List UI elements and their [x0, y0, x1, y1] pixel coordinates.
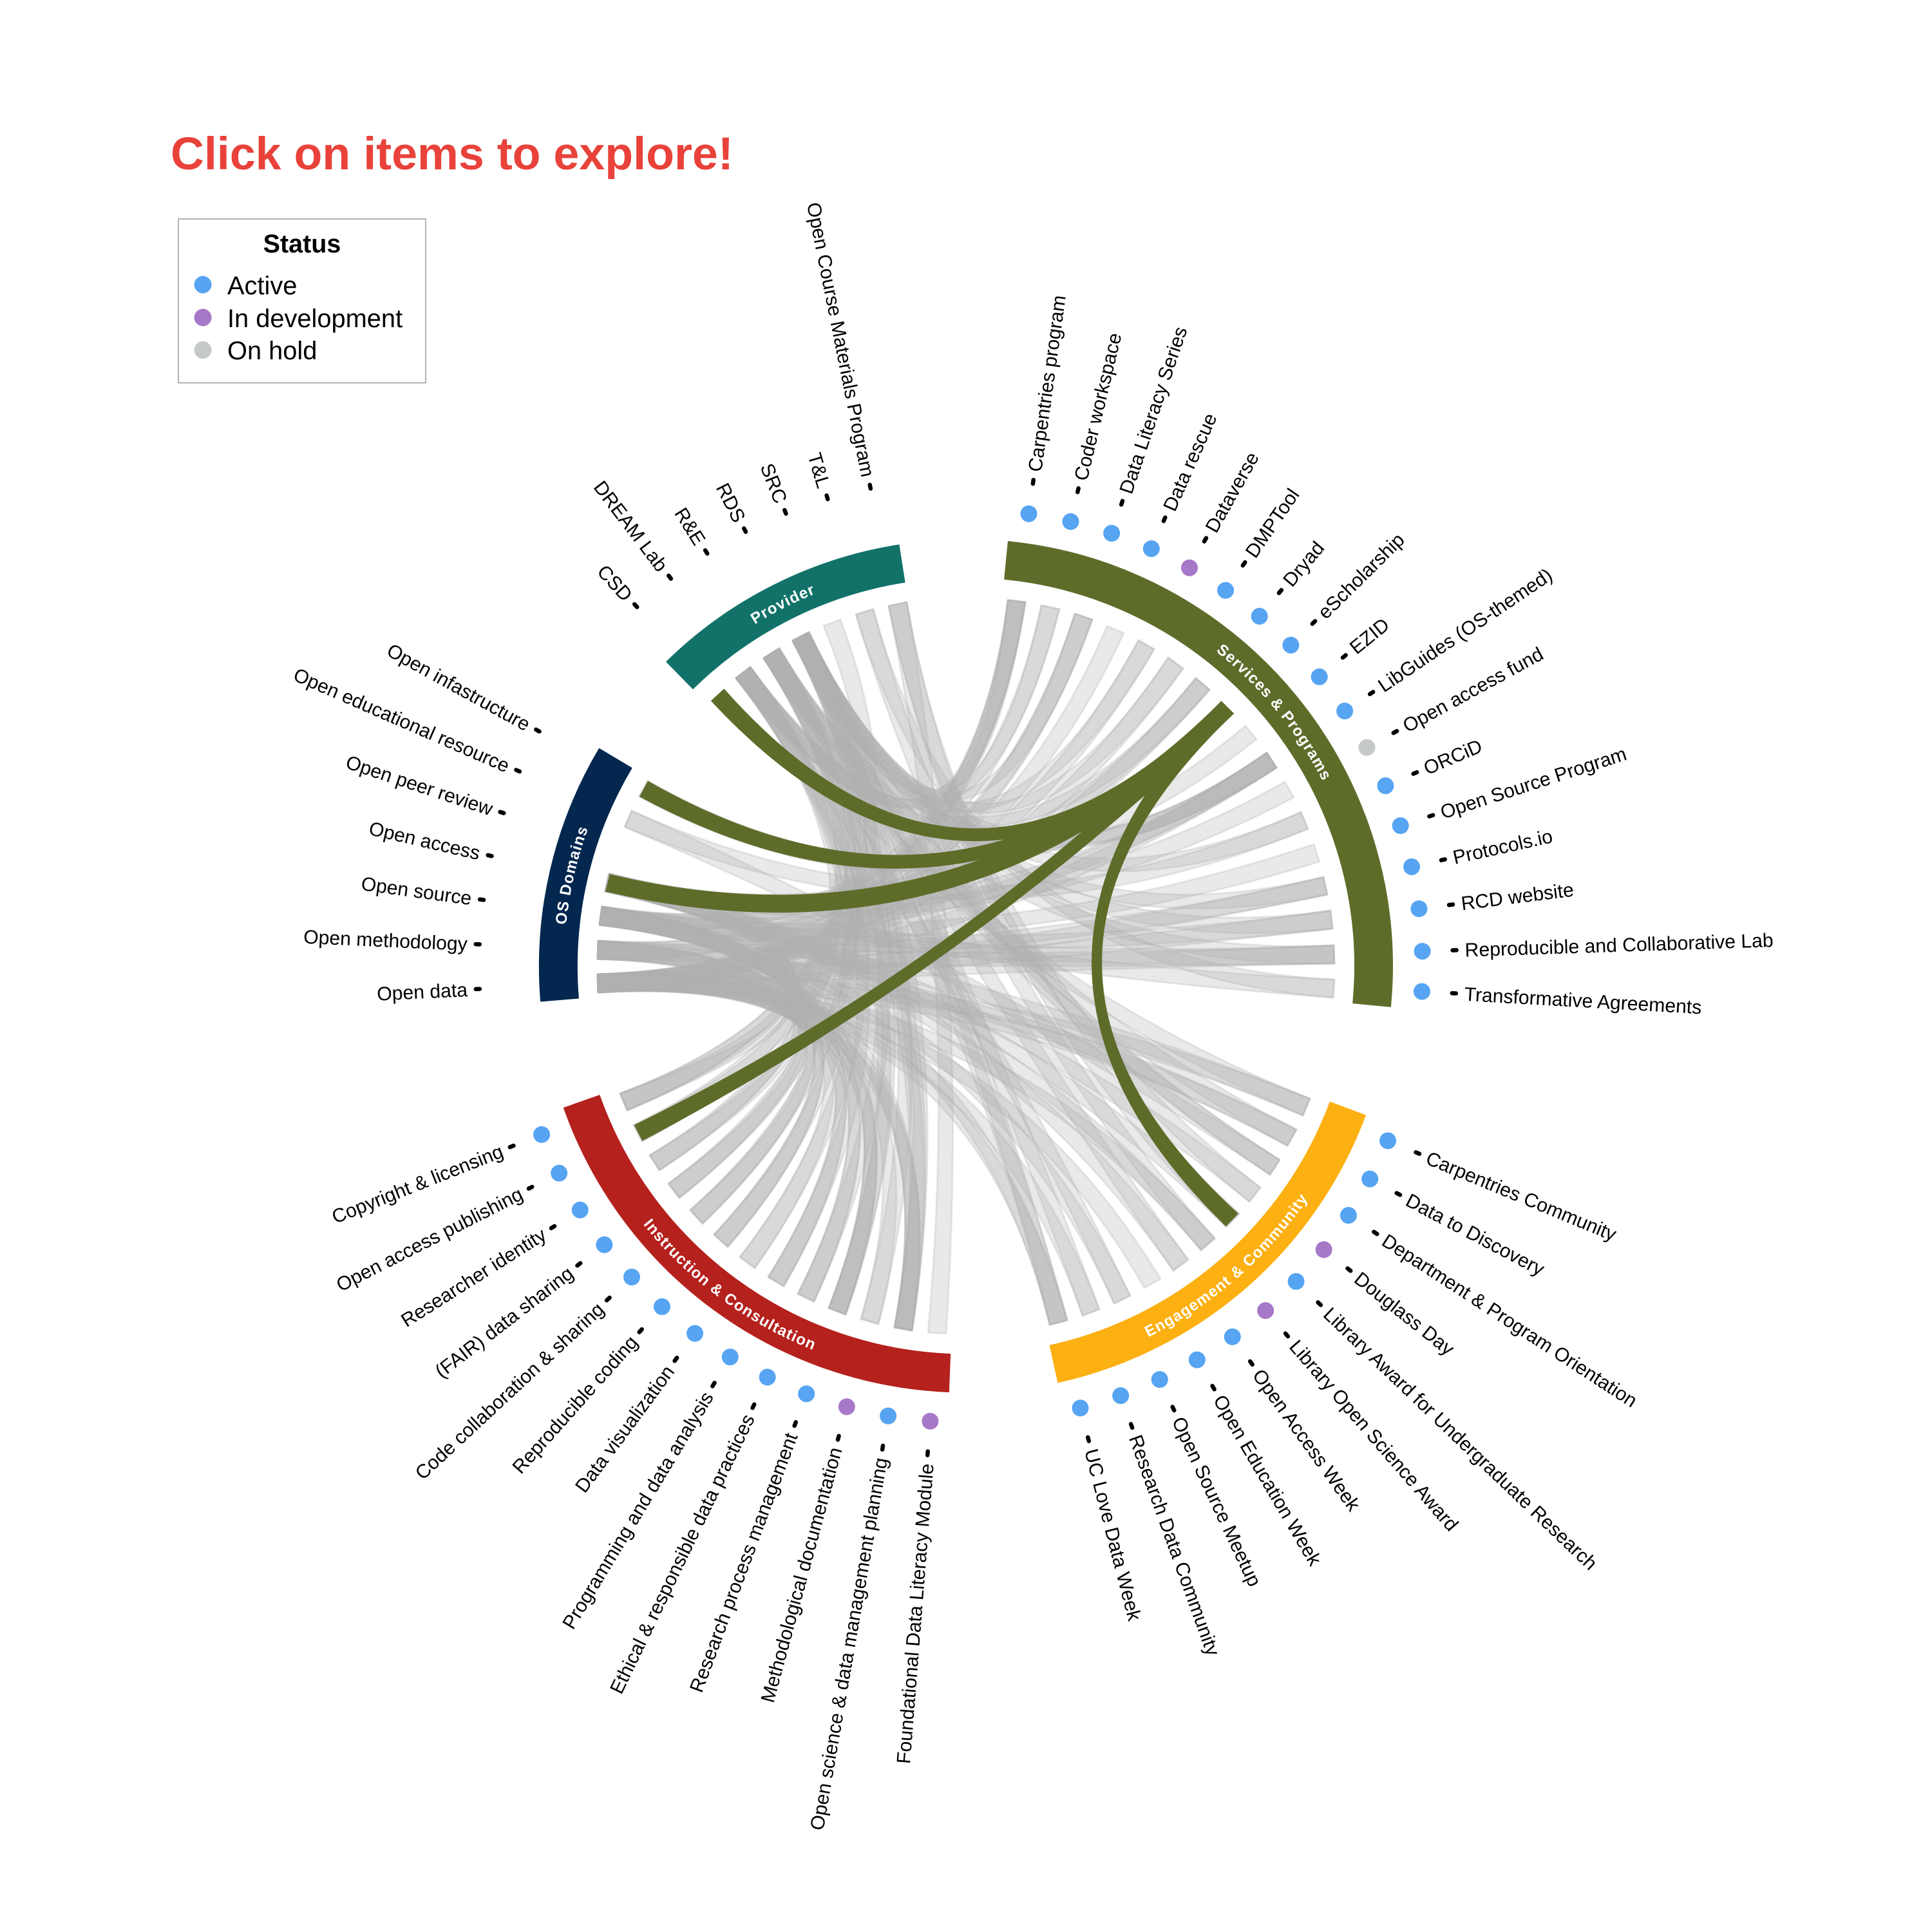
item: Methodological documentation: Methodological documentation: [757, 1445, 847, 1705]
item: Open methodology: Open methodology: [303, 927, 468, 955]
item: RCD website: [1410, 879, 1575, 921]
title: Click on items to explore!: [171, 128, 734, 180]
group arc: Instruction & Consultation: [563, 1095, 951, 1392]
legend: status: Status: [263, 230, 341, 258]
item: Coder workspace: Coder workspace: [1071, 331, 1126, 483]
item: Code collaboration & sharing: Code collaboration & sharing: [412, 1299, 609, 1484]
items: Instruction & Consultation: [329, 1122, 942, 1832]
group arc: Services & Programs: Services & Programs: [1217, 645, 1329, 780]
item: R&E: [670, 504, 715, 560]
legend: status: Active: [227, 272, 297, 300]
item: Transformative Agreements: Transformative Agreements: [1464, 984, 1702, 1018]
item: Data Literacy Series: [1099, 324, 1191, 545]
item: EZID: [1307, 614, 1394, 691]
item: LibGuides (OS-themed): [1332, 565, 1557, 725]
group arc: OS Domains: OS Domains: [556, 827, 587, 923]
item: EZID: EZID: [1346, 614, 1394, 659]
item: Programming and data analysis: Programming and data analysis: [559, 1388, 718, 1633]
item: RDS: RDS: [712, 480, 749, 526]
item: Open access publishing: Open access publishing: [333, 1184, 526, 1296]
item: Open peer review: Open peer review: [343, 752, 495, 820]
item: CSD: CSD: [592, 561, 636, 605]
item: Carpentries program: [1018, 294, 1070, 524]
item: Open Education Week: Open Education Week: [1209, 1392, 1325, 1570]
item: Library Open Science Award: Library Open Science Award: [1285, 1336, 1462, 1535]
items: Engagement & Community: [1067, 1128, 1641, 1659]
item: Copyright & licensing: Copyright & licensing: [329, 1141, 506, 1228]
item: Open Access Week: [1218, 1324, 1364, 1516]
item: Douglass Day: Douglass Day: [1350, 1268, 1459, 1360]
items: Services & Programs: [1018, 294, 1774, 1018]
group arc: Engagement & Community: Engagement & Community: [1144, 1194, 1307, 1337]
item: Data to Discovery: [1357, 1166, 1548, 1280]
item: Research Data Community: Research Data Community: [1124, 1432, 1224, 1659]
legend: status: On hold: [227, 337, 317, 365]
item: Carpentries Community: [1376, 1128, 1620, 1245]
group arc: Engagement & Community: [1050, 1101, 1367, 1383]
highlighted chords: eScholarship: [609, 693, 1234, 1222]
item: Coder workspace: [1059, 331, 1126, 533]
group arc: OS Domains: [538, 748, 632, 1002]
item: UC Love Data Week: UC Love Data Week: [1080, 1446, 1145, 1624]
item: Data visualization: [571, 1321, 709, 1497]
items: OS Domains: [290, 640, 544, 1005]
item: T&L: [803, 451, 837, 502]
item: Dataverse: Dataverse: [1202, 449, 1264, 536]
item: Library Award for Undergraduate Research: Library Award for Undergraduate Research: [1319, 1303, 1601, 1575]
item: RCD website: RCD website: [1460, 879, 1575, 914]
item: Research process management: Research process management: [686, 1430, 802, 1696]
item: Open access: Open access: [367, 818, 482, 864]
legend: status: [178, 219, 426, 383]
item: ORCiD: ORCiD: [1421, 735, 1486, 779]
item: Open Source Program: Open Source Program: [1438, 743, 1629, 824]
item: Data rescue: Data rescue: [1159, 410, 1222, 515]
item: DMPTool: [1213, 485, 1304, 603]
item: eScholarship: [1278, 529, 1409, 659]
item: Open Course Materials Program: Open Course Materials Program: [802, 201, 878, 478]
item: eScholarship: eScholarship: [1314, 529, 1409, 623]
item: Data rescue: [1139, 410, 1222, 561]
item: Researcher identity: Researcher identity: [397, 1224, 551, 1332]
item: Open science & data management planning: Open science & data management planning: [807, 1456, 892, 1832]
gray chords: [598, 600, 1334, 1334]
group arc: Services & Programs: [1004, 541, 1393, 1007]
item: LibGuides (OS-themed): LibGuides (OS-themed): [1374, 565, 1557, 697]
item: CSD: [592, 561, 645, 614]
chord diagram: [290, 201, 1774, 1832]
item: (FAIR) data sharing: [431, 1232, 618, 1383]
item: Open Source Meetup: Open Source Meetup: [1168, 1414, 1265, 1590]
item: Open data: Open data: [377, 980, 468, 1005]
item: Data Literacy Series: Data Literacy Series: [1116, 324, 1191, 497]
items: Provider: [589, 201, 880, 614]
item: Foundational Data Literacy Module: Foundational Data Literacy Module: [893, 1463, 938, 1765]
item: DREAM Lab: DREAM Lab: [589, 477, 672, 576]
group arc: Provider: Provider: [750, 586, 813, 624]
item: Reproducible coding: Reproducible coding: [509, 1332, 642, 1478]
item: Open infastructure: Open infastructure: [383, 640, 533, 735]
item: ORCiD: [1374, 735, 1486, 799]
item: Open Source Program: [1390, 743, 1629, 839]
item: T&L: T&L: [803, 451, 834, 491]
item: Reproducible and Collaborative Lab: Reproducible and Collaborative Lab: [1464, 930, 1774, 961]
item: Department & Program Orientation: Department & Program Orientation: [1378, 1230, 1641, 1412]
item: Open Education Week: [1183, 1347, 1325, 1570]
item: Open access fund: [1355, 643, 1547, 761]
group arc: Instruction & Consultation: Instruction & Consultation: [644, 1218, 814, 1350]
group arc: Provider: [666, 544, 905, 689]
item: (FAIR) data sharing: (FAIR) data sharing: [431, 1263, 578, 1383]
item: Open access fund: Open access fund: [1399, 643, 1547, 737]
item: Dryad: [1247, 538, 1329, 630]
item: Open educational resource: Open educational resource: [290, 665, 513, 777]
item: Copyright & licensing: [329, 1122, 554, 1228]
item: UC Love Data Week: [1067, 1397, 1145, 1624]
item: Douglass Day: [1311, 1236, 1459, 1360]
item: Open Access Week: Open Access Week: [1248, 1365, 1364, 1516]
item: Protocols.io: [1401, 826, 1555, 880]
legend: status: In development: [227, 305, 402, 333]
item: Open source: Open source: [360, 873, 473, 909]
item: Reproducible coding: [509, 1294, 676, 1478]
item: DMPTool: DMPTool: [1242, 485, 1304, 562]
item: Data visualization: Data visualization: [571, 1361, 679, 1497]
item: SRC: SRC: [756, 460, 791, 506]
item: Carpentries Community: Carpentries Community: [1423, 1148, 1620, 1245]
item: R&E: R&E: [670, 504, 709, 549]
item: Ethical & responsible data practices: Ethical & responsible data practices: [606, 1411, 759, 1697]
item: Dryad: Dryad: [1279, 538, 1329, 591]
item: Open access publishing: [333, 1160, 572, 1296]
item: Open Source Meetup: [1146, 1368, 1265, 1590]
item: Researcher identity: [397, 1197, 593, 1332]
item: Data to Discovery: Data to Discovery: [1402, 1190, 1548, 1280]
item: Carpentries program: Carpentries program: [1025, 294, 1070, 473]
item: Protocols.io: Protocols.io: [1451, 826, 1555, 869]
item: Dataverse: [1177, 449, 1264, 581]
